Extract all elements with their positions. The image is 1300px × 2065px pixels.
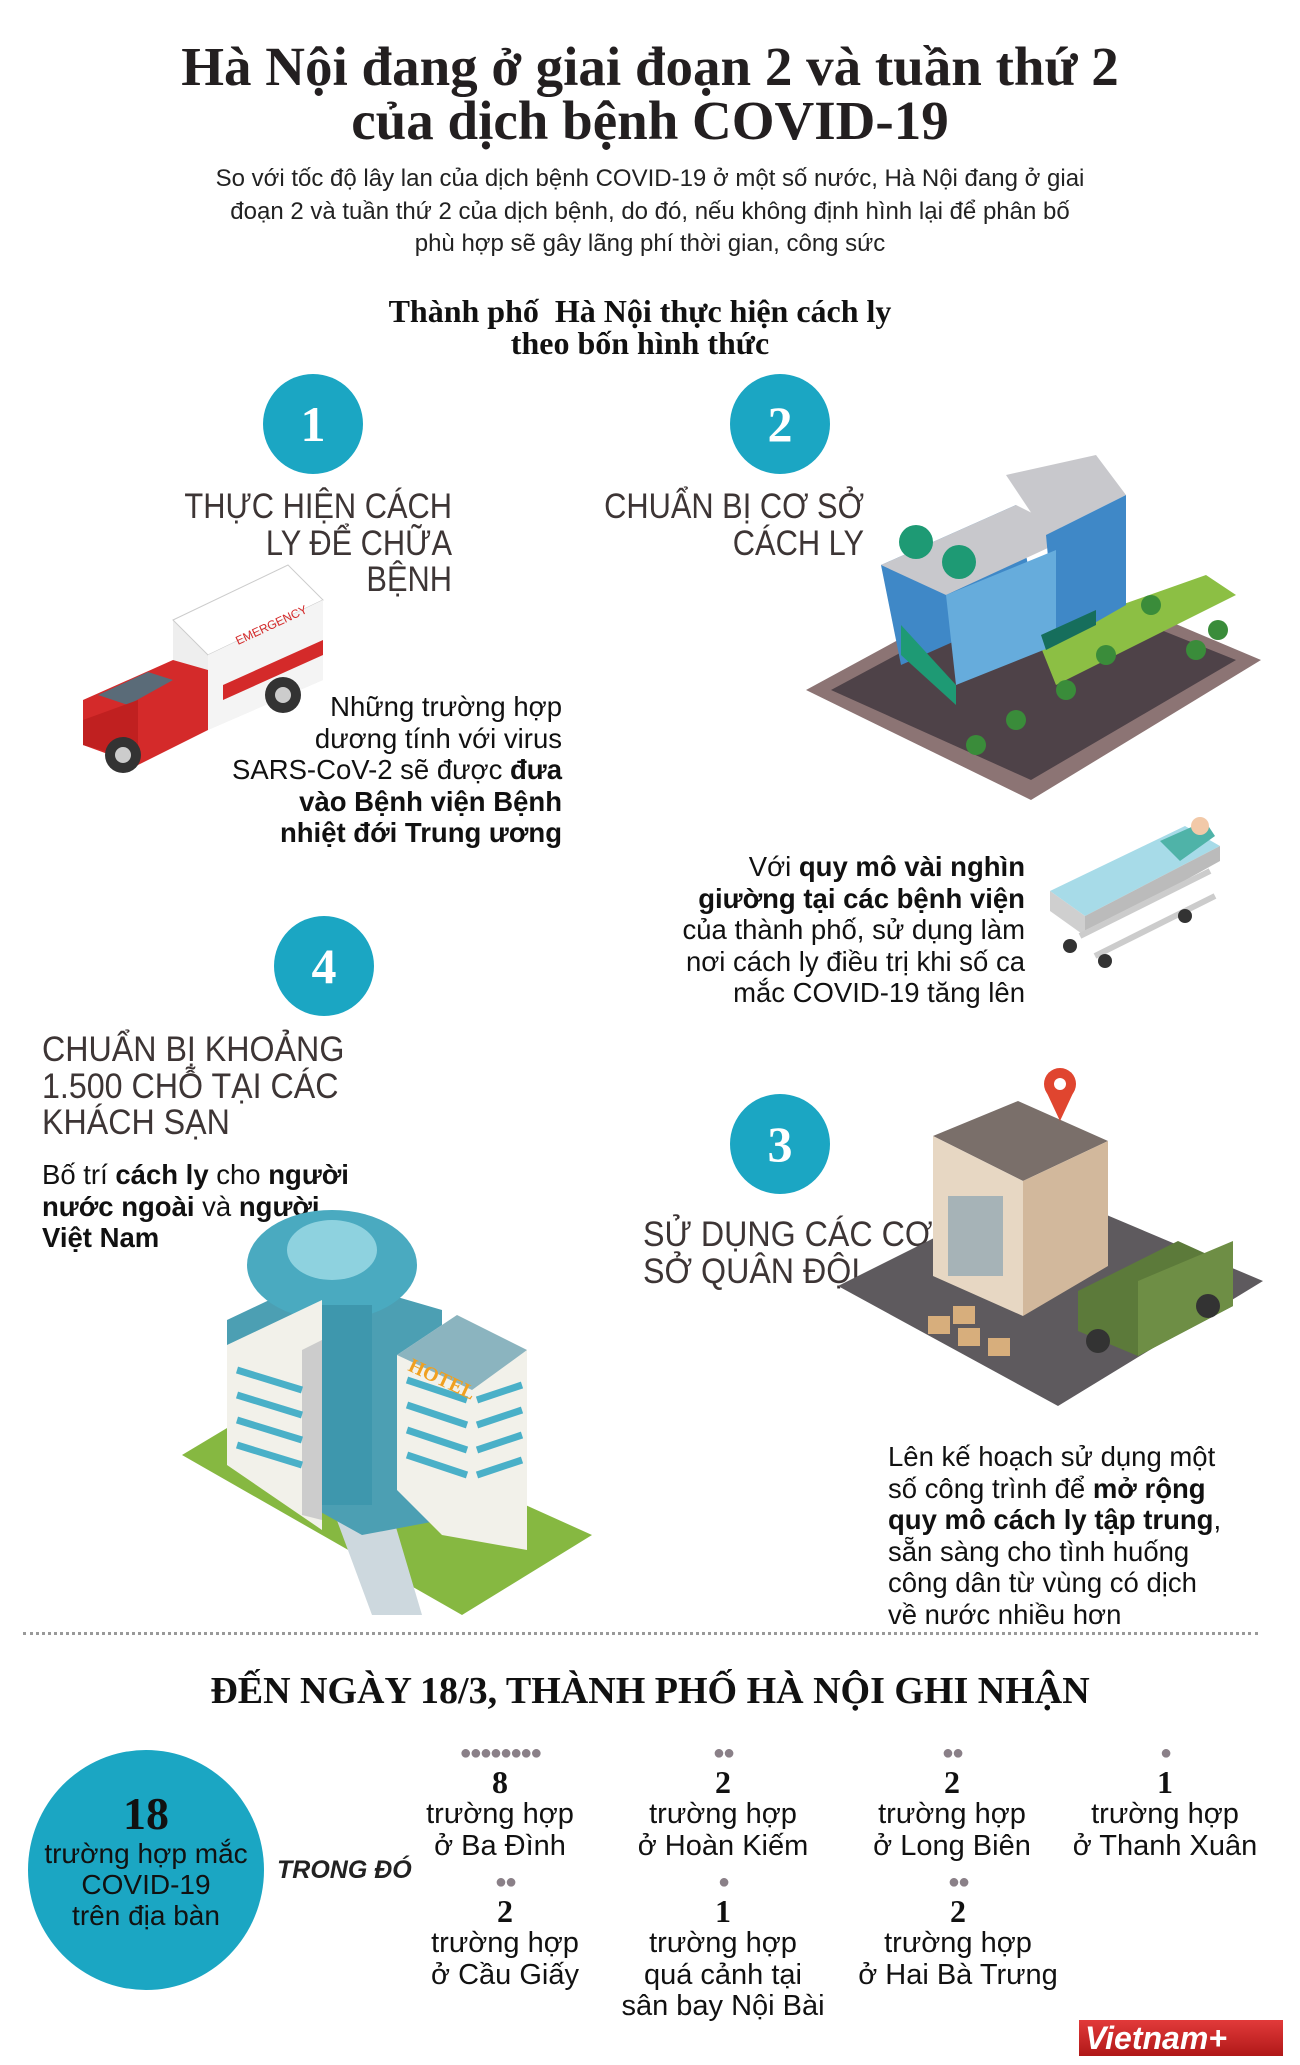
heading 1: THỰC HIỆN CÁCH xyxy=(184,487,452,526)
Cau Giay: trường hợp xyxy=(431,1927,579,1959)
heading 1: BỆNH xyxy=(366,560,452,599)
badge 2 xyxy=(730,374,830,474)
title: Hà Nội đang ở giai đoạn 2 và tuần thứ 2 xyxy=(181,36,1119,97)
Cau Giay: ●● xyxy=(495,1871,515,1893)
Noi Bai: 1 xyxy=(715,1893,731,1929)
text block 2 xyxy=(682,851,1026,1008)
intro paragraph: đoạn 2 và tuần thứ 2 của dịch bệnh, do đó, nếu không định hình lại để phân bố xyxy=(230,198,1070,224)
Thanh Xuan xyxy=(1073,1742,1257,1862)
text block 1: Những trường hợp xyxy=(330,691,562,722)
text block 3 xyxy=(888,1441,1221,1630)
text block 4 xyxy=(42,1159,349,1253)
title xyxy=(181,36,1119,151)
subtitle xyxy=(389,293,892,361)
Thanh Xuan: 1 xyxy=(1157,1764,1173,1800)
intro paragraph xyxy=(216,165,1084,257)
badge 3: 3 xyxy=(768,1116,792,1172)
intro paragraph: So với tốc độ lây lan của dịch bệnh COVID-19 ở một số nước, Hà Nội đang ở giai xyxy=(216,165,1084,192)
Cau Giay: ở Cầu Giấy xyxy=(431,1958,579,1990)
section heading: ĐẾN NGÀY 18/3, THÀNH PHỐ HÀ NỘI GHI NHẬN xyxy=(210,1670,1090,1712)
text block 4: nước ngoài và người xyxy=(42,1190,320,1222)
Long Bien: 2 xyxy=(944,1764,960,1800)
Hoan Kiem xyxy=(638,1742,808,1862)
text block 3: về nước nhiều hơn xyxy=(888,1598,1121,1630)
badge 4 xyxy=(274,916,374,1016)
heading 2: CHUẨN BỊ CƠ SỞ xyxy=(604,487,864,526)
text block 2: giường tại các bệnh viện xyxy=(698,882,1025,914)
text block 3: quy mô cách ly tập trung, xyxy=(888,1504,1221,1535)
icon: hotel xyxy=(182,1210,592,1615)
text block 2: mắc COVID-19 tăng lên xyxy=(733,977,1025,1008)
Cau Giay xyxy=(431,1871,579,1990)
text block 4: Việt Nam xyxy=(42,1222,159,1253)
text block 3: số công trình để mở rộng xyxy=(888,1472,1206,1504)
Ba Dinh xyxy=(426,1742,574,1862)
heading 1: LY ĐỂ CHỮA xyxy=(266,524,452,562)
Hoan Kiem: ở Hoàn Kiếm xyxy=(638,1830,808,1862)
Thanh Xuan: ở Thanh Xuân xyxy=(1073,1830,1257,1862)
Ba Dinh: ở Ba Đình xyxy=(434,1830,566,1862)
icon: hospital bed xyxy=(1050,817,1220,968)
subtitle: theo bốn hình thức xyxy=(511,325,769,361)
heading 2 xyxy=(604,486,864,562)
text block 1: nhiệt đới Trung ương xyxy=(280,817,562,848)
Long Bien xyxy=(873,1742,1031,1862)
badge 2: 2 xyxy=(768,396,792,452)
heading 4: KHÁCH SẠN xyxy=(42,1103,230,1142)
text block 1: SARS-CoV-2 sẽ được đưa xyxy=(232,754,562,785)
title: của dịch bệnh COVID-19 xyxy=(351,90,949,151)
heading 3 xyxy=(643,1214,932,1290)
Cau Giay: 2 xyxy=(497,1893,513,1929)
total circle: 18 xyxy=(123,1788,169,1839)
Ba Dinh: ●●●●●●●● xyxy=(460,1742,540,1764)
Long Bien: ●● xyxy=(942,1742,962,1764)
icon: ambulance xyxy=(83,564,324,773)
icon: hotel: HOTEL xyxy=(405,1355,479,1405)
district grid xyxy=(426,1742,1257,2022)
badge 1: 1 xyxy=(300,396,326,452)
heading 2: CÁCH LY xyxy=(733,524,864,562)
text block 3: công dân từ vùng có dịch xyxy=(888,1567,1197,1598)
Noi Bai xyxy=(621,1871,825,2022)
icon: ambulance: EMERGENCY xyxy=(233,602,309,648)
Hai Ba Trung: trường hợp xyxy=(884,1927,1032,1959)
logo xyxy=(1079,2020,1283,2056)
Hoan Kiem: 2 xyxy=(715,1764,731,1800)
Noi Bai: ● xyxy=(718,1871,728,1893)
Long Bien: trường hợp xyxy=(878,1798,1026,1830)
badge 4: 4 xyxy=(312,938,336,994)
Noi Bai: trường hợp xyxy=(649,1927,797,1959)
heading 4 xyxy=(42,1029,344,1142)
heading 3: SỬ DỤNG CÁC CƠ xyxy=(643,1215,932,1254)
text block 2: của thành phố, sử dụng làm xyxy=(682,914,1025,945)
text block 2: nơi cách ly điều trị khi số ca xyxy=(686,946,1025,976)
Hai Ba Trung: ●● xyxy=(948,1871,968,1893)
badge 3 xyxy=(730,1094,830,1194)
icon: hospital xyxy=(806,455,1261,800)
Hoan Kiem: trường hợp xyxy=(649,1798,797,1830)
heading 3: SỞ QUÂN ĐỘI xyxy=(643,1252,860,1290)
text block 3: sẵn sàng cho tình huống xyxy=(888,1536,1189,1566)
total circle: trên địa bàn xyxy=(72,1900,220,1931)
total circle: COVID-19 xyxy=(81,1869,211,1900)
text block 4: Bố trí cách ly cho người xyxy=(42,1159,349,1190)
text block 1 xyxy=(232,691,562,848)
Noi Bai: quá cảnh tại xyxy=(644,1958,802,1990)
Ba Dinh: trường hợp xyxy=(426,1798,574,1830)
heading 4: 1.500 CHỖ TẠI CÁC xyxy=(42,1066,338,1106)
Hai Ba Trung: 2 xyxy=(950,1893,966,1929)
total circle: trường hợp mắc xyxy=(44,1838,248,1869)
Hai Ba Trung: ở Hai Bà Trưng xyxy=(858,1958,1058,1990)
text block 1: vào Bệnh viện Bệnh xyxy=(299,786,562,816)
logo: Vietnam+ xyxy=(1085,2020,1227,2056)
heading 1 xyxy=(184,487,452,599)
Thanh Xuan: trường hợp xyxy=(1091,1798,1239,1830)
subtitle: Thành phố Hà Nội thực hiện cách ly xyxy=(389,293,891,329)
intro paragraph: phù hợp sẽ gây lãng phí thời gian, công sức xyxy=(415,230,885,257)
Noi Bai: sân bay Nội Bài xyxy=(621,1990,825,2022)
Hoan Kiem: ●● xyxy=(713,1742,733,1764)
total circle xyxy=(28,1750,264,1990)
Long Bien: ở Long Biên xyxy=(873,1830,1031,1862)
Thanh Xuan: ● xyxy=(1160,1742,1170,1764)
label: trong do: TRONG ĐÓ xyxy=(277,1856,412,1884)
text block 1: dương tính với virus xyxy=(315,722,562,754)
icon: military base xyxy=(838,1068,1263,1406)
Ba Dinh: 8 xyxy=(492,1764,508,1800)
Hai Ba Trung xyxy=(858,1871,1058,1990)
heading 4: CHUẨN BỊ KHOẢNG xyxy=(42,1030,344,1069)
text block 2: Với quy mô vài nghìn xyxy=(749,851,1025,882)
badge 1 xyxy=(263,374,363,474)
text block 3: Lên kế hoạch sử dụng một xyxy=(888,1441,1215,1472)
